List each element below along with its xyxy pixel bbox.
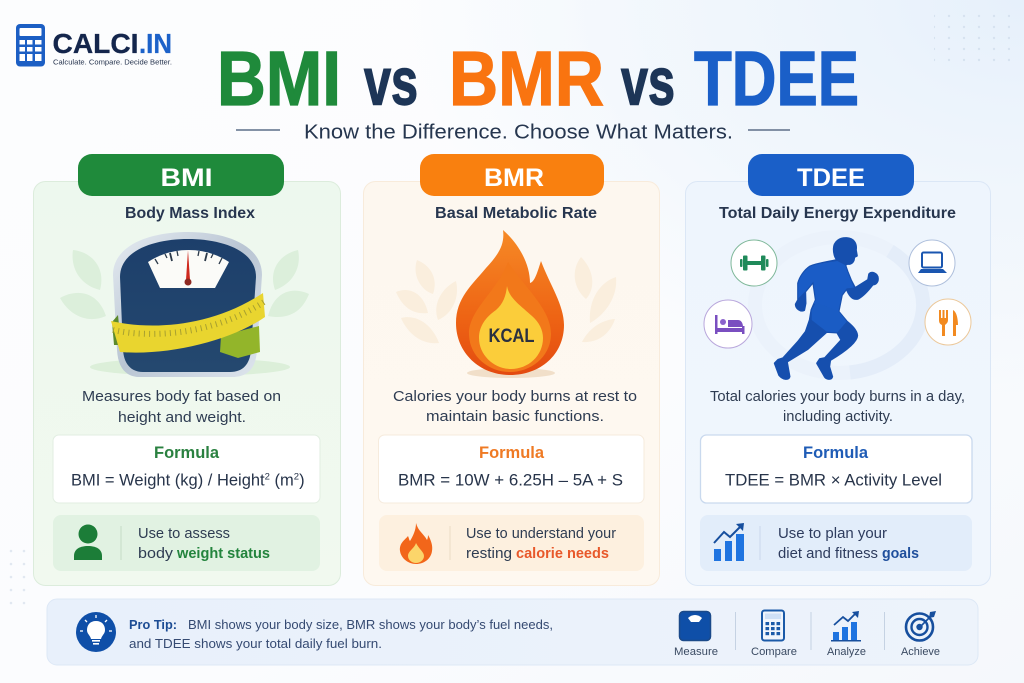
panel: BMR xyxy=(364,154,660,586)
usage note: calorie needs xyxy=(516,546,609,562)
formula box: 2 xyxy=(294,472,299,482)
description xyxy=(393,389,637,425)
usage note: goals xyxy=(882,546,919,562)
icon: laptop xyxy=(909,240,955,286)
icon: flame with KCAL xyxy=(396,230,616,378)
icon: weighing scale with measuring tape xyxy=(60,232,309,377)
description: Total calories your body burns in a day, xyxy=(710,389,965,405)
step: Achieve xyxy=(901,611,940,658)
usage note: resting xyxy=(466,546,512,562)
formula box: BMI = Weight (kg) / Height xyxy=(71,472,265,490)
icon: activity ring xyxy=(755,237,923,373)
title: BMI xyxy=(217,36,341,122)
description: including activity. xyxy=(783,409,893,425)
icon: bed xyxy=(704,300,752,348)
formula box: Formula xyxy=(154,444,220,462)
usage note: Use to understand your xyxy=(466,526,616,542)
step: Analyze: Analyze xyxy=(827,646,866,658)
icon: small flame xyxy=(400,523,432,564)
formula box: ) xyxy=(299,472,305,490)
title: BMR xyxy=(449,36,604,122)
step: Measure: Measure xyxy=(674,646,718,658)
formula box: Formula xyxy=(479,444,545,462)
step: Measure xyxy=(674,612,718,658)
icon: flame with KCAL: KCAL xyxy=(488,326,535,347)
formula box: TDEE = BMR × Activity Level xyxy=(725,472,942,490)
pill: TDEE xyxy=(748,154,914,196)
description xyxy=(710,389,965,425)
heading: Basal Metabolic Rate: Basal Metabolic Rate xyxy=(435,205,597,222)
usage note: Use to assess xyxy=(138,526,230,542)
step: Analyze xyxy=(827,611,866,658)
formula box xyxy=(378,435,644,503)
brand name: .IN xyxy=(139,28,172,59)
panel: pro tip bar xyxy=(47,599,978,665)
pro tip text: Pro Tip: xyxy=(129,617,177,632)
pill: BMI: BMI xyxy=(160,164,212,192)
usage note: Use to plan your xyxy=(778,526,887,542)
pro tip text: BMI shows your body size, BMR shows your body’s fuel needs, xyxy=(188,617,553,632)
usage note xyxy=(53,515,320,571)
heading: Total Daily Energy Expenditure: Total Daily Energy Expenditure xyxy=(719,205,956,222)
icon: growth chart xyxy=(714,523,744,561)
title xyxy=(217,36,859,122)
usage note xyxy=(700,515,972,571)
description: height and weight. xyxy=(118,410,246,426)
pill: TDEE: TDEE xyxy=(797,164,865,192)
description: Measures body fat based on xyxy=(82,389,281,405)
icon: light bulb xyxy=(76,612,116,652)
step: Achieve: Achieve xyxy=(901,646,940,658)
brand name: CALCI xyxy=(52,28,138,59)
subtitle: Know the Difference. Choose What Matters. xyxy=(304,122,733,144)
formula box: (m xyxy=(270,472,294,490)
description: maintain basic functions. xyxy=(426,409,604,425)
icon: person xyxy=(74,524,102,560)
usage note xyxy=(379,515,644,571)
panel: BMI xyxy=(34,154,340,586)
icon: calculator logo xyxy=(16,24,45,66)
icon: running figure xyxy=(775,238,878,379)
description: Calories your body burns at rest to xyxy=(393,389,637,405)
formula box xyxy=(53,435,320,503)
step: Compare xyxy=(751,610,797,658)
formula box xyxy=(700,435,972,503)
formula box: 2 xyxy=(265,472,270,482)
logo: CALCI.IN xyxy=(16,24,172,66)
usage note: diet and fitness xyxy=(778,546,878,562)
panel: TDEE xyxy=(686,154,990,586)
pill: BMR: BMR xyxy=(484,164,544,192)
step: Compare: Compare xyxy=(751,646,797,658)
usage note: weight status xyxy=(176,546,270,562)
title: vs xyxy=(364,44,418,120)
pill: BMI xyxy=(78,154,284,196)
formula box: BMR = 10W + 6.25H – 5A + S xyxy=(398,472,623,490)
pro tip text: and TDEE shows your total daily fuel burn. xyxy=(129,636,382,651)
icon: fork and knife xyxy=(925,299,971,345)
pro tip text xyxy=(129,617,553,651)
description xyxy=(82,389,281,426)
icon: dumbbell xyxy=(731,240,777,286)
tagline: Calculate. Compare. Decide Better. xyxy=(53,58,172,66)
heading: Body Mass Index: Body Mass Index xyxy=(125,205,255,222)
pill: BMR xyxy=(420,154,604,196)
formula box: Formula xyxy=(803,444,869,462)
usage note: body xyxy=(138,546,174,562)
title: TDEE xyxy=(694,36,859,122)
title: vs xyxy=(621,44,675,120)
